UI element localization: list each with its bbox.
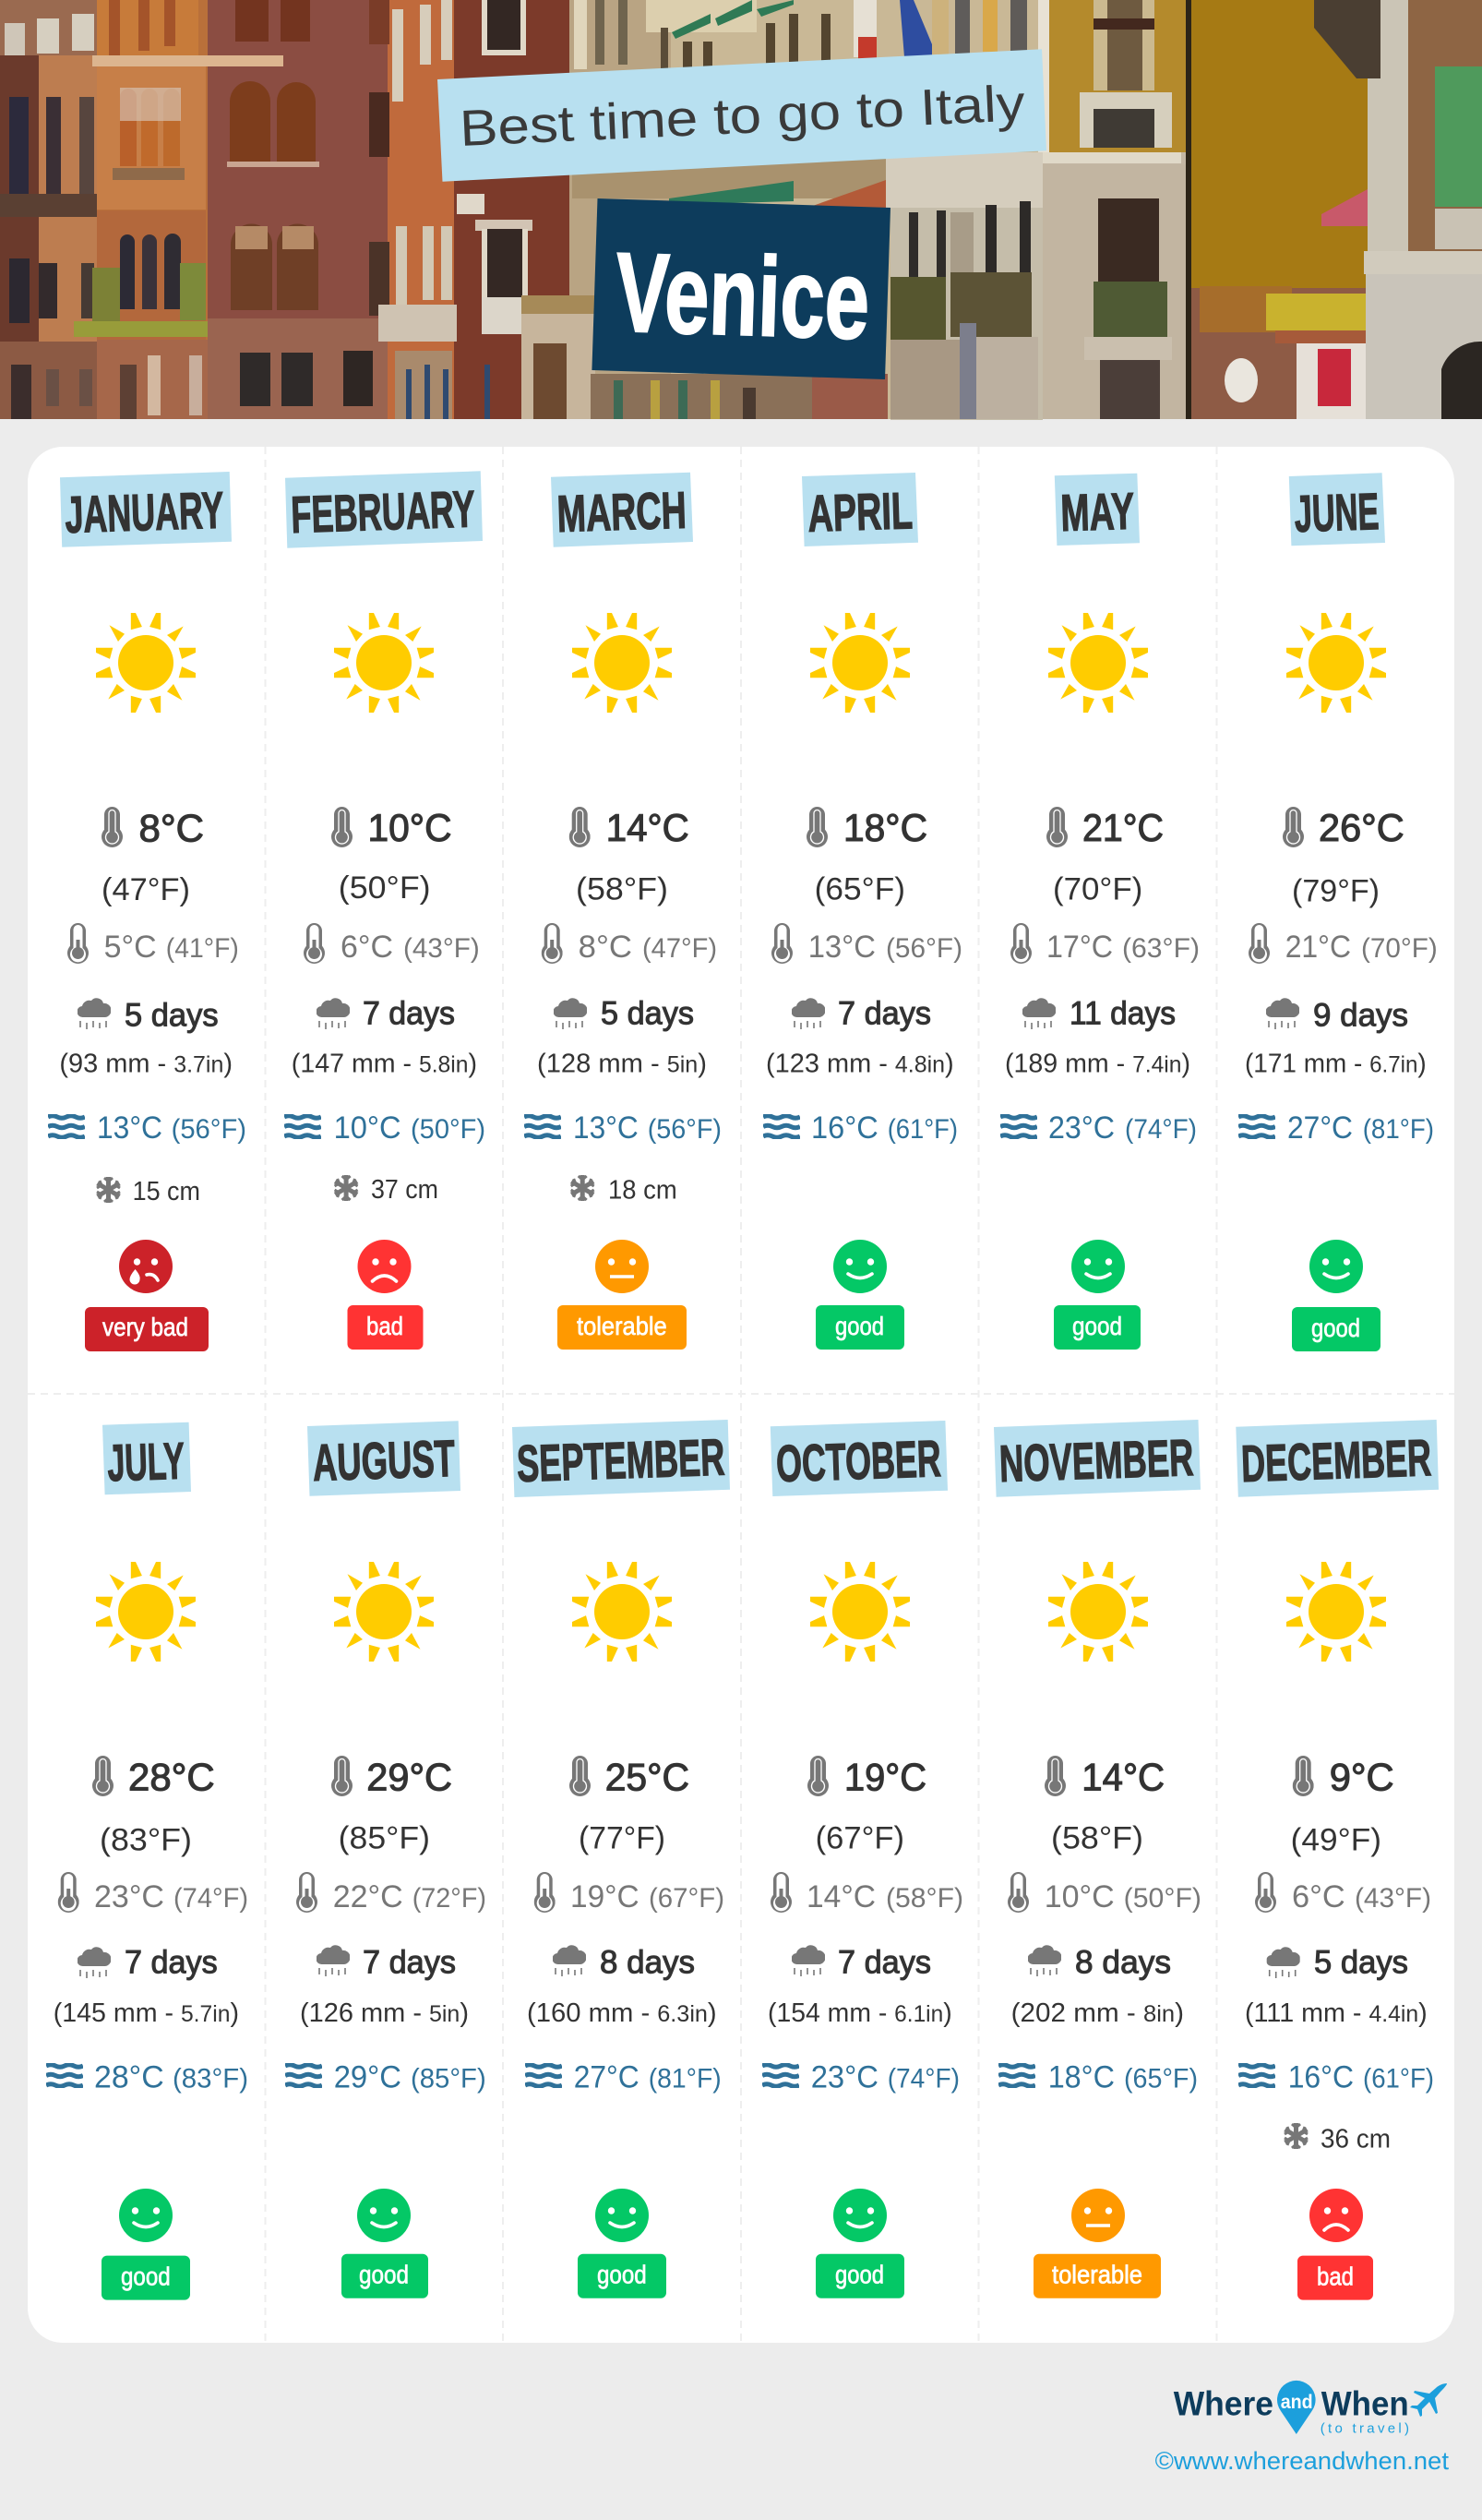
grid lines xyxy=(28,447,1454,2343)
average temperature xyxy=(1283,806,1404,908)
average temperature xyxy=(331,806,452,906)
rainfall: 5 days xyxy=(125,997,219,1034)
icon: sun xyxy=(810,1562,910,1662)
logo: Where and When: When xyxy=(1321,2385,1409,2423)
sea temperature: (81°F) xyxy=(649,2064,722,2094)
minimum temperature xyxy=(1010,923,1200,965)
sea temperature xyxy=(1238,1110,1434,1146)
minimum temperature xyxy=(67,923,239,965)
panel: October xyxy=(762,1421,963,2298)
sea temperature: 23°C xyxy=(1048,1110,1115,1146)
rainfall: 7 days xyxy=(125,1944,218,1981)
rainfall: (202 mm - 8in) xyxy=(1011,1998,1184,2028)
average temperature: (49°F) xyxy=(1291,1822,1381,1857)
panel: December xyxy=(1236,1420,1439,2300)
rainfall: 5 days xyxy=(1314,1944,1408,1981)
average temperature xyxy=(807,806,927,906)
minimum temperature: (74°F) xyxy=(173,1883,248,1914)
month label: October xyxy=(771,1421,948,1496)
sea temperature: (56°F) xyxy=(172,1114,246,1145)
minimum temperature: 5°C xyxy=(104,930,157,965)
sea temperature: (85°F) xyxy=(411,2064,486,2094)
icon: sun xyxy=(96,613,196,713)
snowfall: 36 cm xyxy=(1321,2125,1391,2154)
icon: sun xyxy=(572,613,672,713)
minimum temperature: 6°C xyxy=(1292,1879,1345,1914)
month label: May: MAY xyxy=(1059,482,1135,542)
banner: Venice xyxy=(592,198,890,379)
icon: sun xyxy=(96,1562,196,1662)
sea temperature xyxy=(46,2060,248,2095)
minimum temperature: 17°C xyxy=(1046,930,1113,965)
sea temperature: 13°C xyxy=(573,1110,639,1146)
rainfall xyxy=(1245,997,1427,1078)
month label: March xyxy=(551,473,693,547)
rating: very bad: very bad xyxy=(102,1313,188,1341)
average temperature: 14°C xyxy=(606,806,689,849)
rating: bad: bad xyxy=(1317,2262,1354,2291)
rainfall: 7 days xyxy=(838,1944,931,1981)
average temperature: (85°F) xyxy=(339,1820,430,1855)
rainfall xyxy=(537,995,707,1078)
rainfall: (145 mm - 5.7in) xyxy=(54,1998,239,2028)
panel: July xyxy=(46,1422,248,2300)
rating: good xyxy=(1054,1240,1141,1350)
rating: bad xyxy=(1297,2189,1373,2300)
snowfall: 15 cm xyxy=(133,1177,200,1206)
rating: good xyxy=(816,2189,904,2298)
month label: January xyxy=(60,472,232,547)
panel: November xyxy=(994,1420,1201,2298)
rainfall: (147 mm - 5.8in) xyxy=(292,1049,477,1078)
month label: April: APRIL xyxy=(807,481,914,543)
logo: Where and When: Where xyxy=(1174,2385,1273,2423)
logo: Where and When xyxy=(1174,2381,1447,2437)
sea temperature: 16°C xyxy=(811,1110,878,1146)
sea temperature: (74°F) xyxy=(1125,1114,1197,1145)
icon: sun xyxy=(1286,613,1386,713)
sea temperature: 27°C xyxy=(574,2060,639,2095)
average temperature xyxy=(1046,806,1164,906)
average temperature: (77°F) xyxy=(579,1820,665,1855)
rainfall: (128 mm - 5in) xyxy=(537,1049,707,1078)
minimum temperature xyxy=(534,1872,724,1914)
month label: August xyxy=(307,1421,460,1496)
snowfall: 18 cm xyxy=(608,1176,677,1206)
icon: sun xyxy=(334,1562,434,1662)
rainfall: (93 mm - 3.7in) xyxy=(59,1049,233,1078)
minimum temperature: 14°C xyxy=(807,1879,876,1914)
minimum temperature: (41°F) xyxy=(166,933,239,964)
minimum temperature: 19°C xyxy=(570,1879,639,1914)
month label: June xyxy=(1289,473,1385,546)
rating: tolerable: tolerable xyxy=(577,1312,667,1340)
average temperature: (50°F) xyxy=(339,870,431,906)
sea temperature: (83°F) xyxy=(173,2064,248,2094)
sea temperature xyxy=(48,1110,246,1146)
month label: August: AUGUST xyxy=(312,1429,456,1492)
rating: good: good xyxy=(121,2262,171,2291)
rainfall xyxy=(292,995,477,1078)
rainfall: (111 mm - 4.4in) xyxy=(1245,1998,1428,2028)
average temperature: (79°F) xyxy=(1292,873,1380,908)
rainfall: 11 days xyxy=(1070,995,1176,1032)
rating: tolerable xyxy=(557,1240,687,1350)
month label: April xyxy=(802,473,918,546)
panel: March xyxy=(524,473,722,1350)
sea temperature: 18°C xyxy=(1048,2060,1115,2095)
month label: November xyxy=(994,1420,1201,1497)
month label: September xyxy=(512,1420,730,1497)
rainfall xyxy=(300,1944,469,2028)
month label: May xyxy=(1055,474,1140,546)
minimum temperature xyxy=(771,1872,963,1914)
minimum temperature: 8°C xyxy=(579,930,632,965)
minimum temperature xyxy=(296,1872,486,1914)
icon: sun xyxy=(572,1562,672,1662)
average temperature: 14°C xyxy=(1082,1756,1165,1798)
minimum temperature xyxy=(1249,923,1438,965)
sea temperature xyxy=(763,1110,958,1146)
rainfall: (160 mm - 6.3in) xyxy=(527,1998,717,2028)
rainfall: 9 days xyxy=(1313,997,1408,1034)
average temperature xyxy=(1291,1756,1394,1857)
rating: good: good xyxy=(359,2261,409,2289)
average temperature: (58°F) xyxy=(576,871,668,906)
sea temperature xyxy=(1000,1110,1197,1146)
average temperature: (70°F) xyxy=(1053,871,1142,906)
panel: September xyxy=(512,1420,730,2298)
minimum temperature xyxy=(1255,1872,1431,1914)
minimum temperature: (67°F) xyxy=(649,1883,724,1914)
average temperature: 19°C xyxy=(844,1756,926,1798)
average temperature xyxy=(1045,1756,1165,1855)
average temperature: 28°C xyxy=(128,1756,215,1798)
minimum temperature: (63°F) xyxy=(1122,933,1200,964)
month label: November: NOVEMBER xyxy=(998,1428,1194,1493)
month label: July xyxy=(102,1422,191,1494)
rating: good xyxy=(102,2189,190,2300)
icon: sun xyxy=(1048,1562,1148,1662)
rating: tolerable xyxy=(1034,2189,1161,2298)
snowfall xyxy=(571,1175,677,1206)
minimum temperature: 6°C xyxy=(341,930,393,965)
rating: good xyxy=(578,2189,666,2298)
rating: tolerable: tolerable xyxy=(1052,2261,1142,2289)
average temperature xyxy=(92,1756,215,1857)
minimum temperature: 13°C xyxy=(808,930,876,965)
minimum temperature: (56°F) xyxy=(886,933,962,964)
sea temperature: (65°F) xyxy=(1124,2064,1198,2094)
icon: airplane xyxy=(1410,2383,1447,2417)
snowfall: 37 cm xyxy=(371,1175,438,1205)
rainfall xyxy=(768,1944,952,2028)
minimum temperature xyxy=(58,1872,248,1914)
average temperature: (83°F) xyxy=(100,1822,192,1857)
icon: sun xyxy=(1048,613,1148,713)
rating: good xyxy=(816,1240,904,1350)
icon: map pin xyxy=(1277,2381,1316,2434)
rainfall: 7 days xyxy=(838,995,931,1032)
average temperature: 9°C xyxy=(1330,1756,1394,1798)
banner: Venice: Venice xyxy=(614,229,871,363)
minimum temperature: 23°C xyxy=(94,1879,164,1914)
rainfall: 8 days xyxy=(1075,1944,1171,1981)
sea temperature: (81°F) xyxy=(1363,1114,1434,1145)
average temperature xyxy=(569,1756,689,1855)
sea temperature xyxy=(762,2060,960,2095)
minimum temperature: 22°C xyxy=(333,1879,403,1914)
minimum temperature: 21°C xyxy=(1285,930,1351,965)
icon: sun xyxy=(334,613,434,713)
month label: February: FEBRUARY xyxy=(290,479,476,544)
snowfall xyxy=(97,1177,200,1206)
rainfall xyxy=(527,1944,717,2028)
average temperature: (67°F) xyxy=(816,1820,904,1855)
panel: May xyxy=(1000,474,1200,1350)
panel: monthly weather card xyxy=(28,447,1454,2343)
rating: bad xyxy=(347,1240,423,1350)
rainfall: (123 mm - 4.8in) xyxy=(766,1049,954,1078)
panel: January xyxy=(48,472,246,1351)
rating: good: good xyxy=(597,2261,647,2289)
sea temperature xyxy=(284,1110,485,1146)
rating: good xyxy=(1292,1240,1380,1351)
rating: bad: bad xyxy=(366,1312,403,1340)
average temperature: (47°F) xyxy=(102,872,190,907)
minimum temperature xyxy=(771,923,962,965)
snowfall xyxy=(335,1175,438,1205)
rating: good: good xyxy=(1311,1314,1360,1342)
sea temperature: (50°F) xyxy=(411,1114,485,1145)
sea temperature: (56°F) xyxy=(648,1114,722,1145)
rainfall: (189 mm - 7.4in) xyxy=(1005,1049,1190,1078)
sea temperature: 23°C xyxy=(811,2060,878,2095)
minimum temperature xyxy=(1008,1872,1201,1914)
average temperature xyxy=(102,807,204,907)
rainfall xyxy=(1011,1944,1184,2028)
minimum temperature: 10°C xyxy=(1045,1879,1115,1914)
sea temperature: 27°C xyxy=(1287,1110,1353,1146)
panel: August xyxy=(285,1421,486,2298)
rainfall xyxy=(59,997,233,1078)
rainfall: 8 days xyxy=(600,1944,695,1981)
rating: good: good xyxy=(1072,1312,1122,1340)
banner: Best time to go to Italy: Best time to go to Italy xyxy=(459,74,1026,157)
rainfall xyxy=(54,1944,239,2028)
average temperature: 29°C xyxy=(366,1756,452,1798)
panel: June xyxy=(1238,473,1438,1351)
minimum temperature: (72°F) xyxy=(412,1883,486,1914)
rating: good xyxy=(341,2189,428,2298)
rainfall: 7 days xyxy=(363,995,455,1032)
rainfall: 7 days xyxy=(363,1944,456,1981)
minimum temperature: (47°F) xyxy=(642,933,717,964)
average temperature xyxy=(569,806,689,906)
rating: good: good xyxy=(835,1312,884,1340)
average temperature: 10°C xyxy=(367,806,452,849)
average temperature: 26°C xyxy=(1319,806,1404,849)
rainfall: (154 mm - 6.1in) xyxy=(768,1998,952,2028)
minimum temperature: (43°F) xyxy=(403,933,480,964)
average temperature xyxy=(807,1756,926,1855)
rating: good: good xyxy=(835,2261,884,2289)
average temperature: (65°F) xyxy=(815,871,905,906)
sea temperature: 16°C xyxy=(1288,2060,1354,2095)
sea temperature xyxy=(525,2060,722,2095)
minimum temperature: (58°F) xyxy=(886,1883,963,1914)
banner: Best time to go to Italy xyxy=(437,49,1046,182)
average temperature: (58°F) xyxy=(1051,1820,1143,1855)
rainfall: (126 mm - 5in) xyxy=(300,1998,469,2028)
logo: Where and When: (to travel) xyxy=(1321,2421,1409,2437)
icon: sun xyxy=(810,613,910,713)
month label: February xyxy=(285,471,483,548)
sea temperature xyxy=(1238,2060,1434,2095)
average temperature: 25°C xyxy=(605,1756,689,1798)
panel: February xyxy=(284,471,485,1350)
minimum temperature xyxy=(304,923,480,965)
sea temperature xyxy=(285,2060,486,2095)
month label: January: JANUARY xyxy=(64,481,224,544)
month label: June: JUNE xyxy=(1294,482,1380,543)
rainfall xyxy=(1005,995,1190,1078)
rainfall: (171 mm - 6.7in) xyxy=(1245,1049,1427,1078)
rainfall xyxy=(1245,1944,1428,2028)
average temperature: 21°C xyxy=(1082,806,1164,849)
sea temperature: (74°F) xyxy=(888,2064,960,2094)
minimum temperature: (43°F) xyxy=(1355,1883,1431,1914)
month label: July: JULY xyxy=(106,1432,185,1492)
website credit: ©www.whereandwhen.net xyxy=(1155,2447,1449,2475)
rainfall: 5 days xyxy=(601,995,694,1032)
sea temperature: 10°C xyxy=(334,1110,401,1146)
icon: sun xyxy=(1286,1562,1386,1662)
rainfall xyxy=(766,995,954,1078)
month label: March: MARCH xyxy=(556,481,687,543)
sea temperature: 28°C xyxy=(94,2060,164,2095)
logo: Where and When: and xyxy=(1281,2392,1313,2413)
photo: Venice canal facades xyxy=(0,0,1482,420)
month label: September: SEPTEMBER xyxy=(516,1428,725,1493)
average temperature xyxy=(331,1756,452,1855)
sea temperature xyxy=(998,2060,1198,2095)
average temperature: 18°C xyxy=(843,806,927,849)
rating: very bad xyxy=(85,1240,209,1351)
sea temperature: (61°F) xyxy=(1363,2064,1434,2094)
average temperature: 8°C xyxy=(138,807,204,849)
sea temperature: 13°C xyxy=(97,1110,162,1146)
sea temperature xyxy=(524,1110,722,1146)
minimum temperature: (70°F) xyxy=(1361,933,1438,964)
panel: April xyxy=(763,473,962,1350)
minimum temperature: (50°F) xyxy=(1124,1883,1201,1914)
month label: October: OCTOBER xyxy=(775,1429,942,1493)
sea temperature: (61°F) xyxy=(888,1114,958,1145)
minimum temperature xyxy=(542,923,717,965)
sea temperature: 29°C xyxy=(334,2060,401,2095)
snowfall xyxy=(1285,2123,1391,2154)
